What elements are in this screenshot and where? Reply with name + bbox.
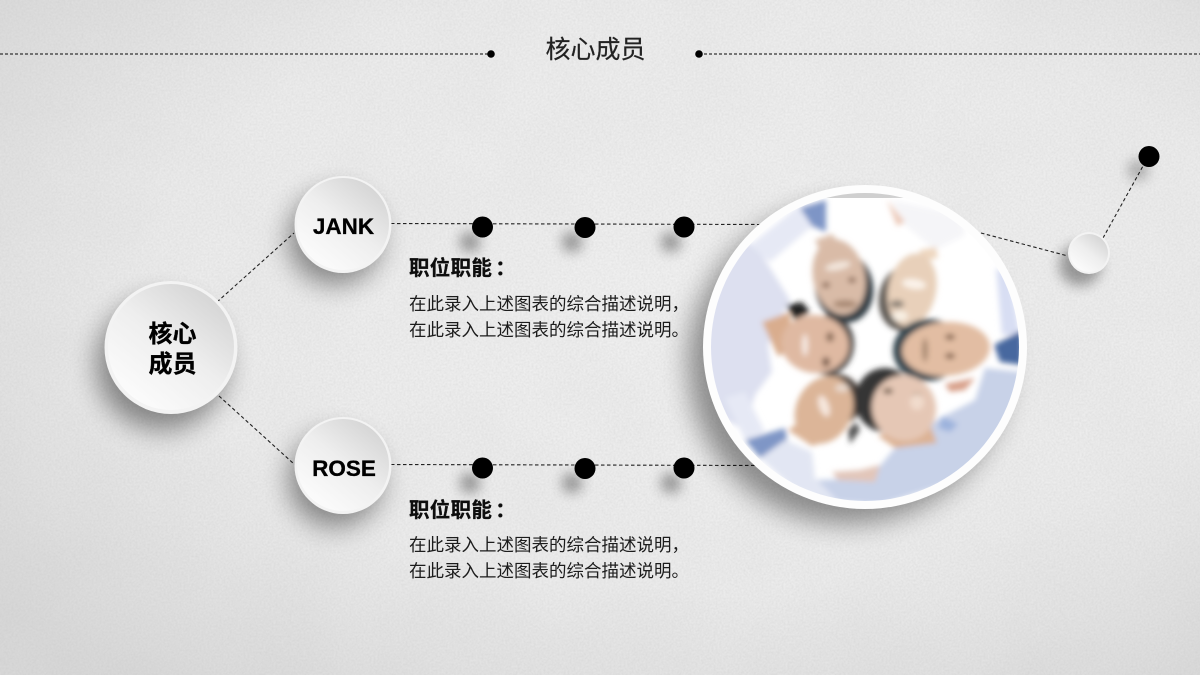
text block: ROSE duties: 在此录入上述图表的综合描述说明， — [409, 535, 689, 555]
text block: ROSE duties — [409, 498, 689, 581]
node: ROSE — [288, 417, 392, 527]
timeline dots: ROSE — [460, 458, 694, 493]
node: JANK — [288, 176, 392, 285]
text block: JANK duties — [409, 256, 689, 340]
node: ROSE: ROSE — [312, 456, 376, 481]
text block: ROSE duties: 职位职能： — [409, 498, 516, 522]
team photo in circular frame — [688, 185, 1030, 524]
face left — [818, 312, 858, 380]
face right — [888, 315, 948, 386]
central node: 核心成员 — [96, 281, 238, 430]
connector lines — [217, 166, 1143, 466]
text block: JANK duties: 在此录入上述图表的综合描述说明。 — [409, 320, 689, 340]
necks — [762, 312, 792, 356]
face bottom-left — [825, 370, 862, 424]
central node: 核心成员: 核心 — [148, 321, 196, 348]
face top-right — [874, 268, 908, 334]
title rule with dots — [0, 50, 1200, 58]
face top-left — [812, 258, 878, 328]
node: JANK: JANK — [313, 214, 375, 239]
clothing — [705, 240, 790, 430]
black endpoint dot — [1128, 146, 1160, 180]
text block: JANK duties: 职位职能： — [409, 256, 516, 280]
small node with connector — [1059, 232, 1110, 286]
central node: 核心成员: 成员 — [148, 351, 196, 378]
title: 核心成员 — [545, 36, 646, 64]
text block: ROSE duties: 在此录入上述图表的综合描述说明。 — [409, 561, 689, 581]
text block: JANK duties: 在此录入上述图表的综合描述说明， — [409, 294, 689, 314]
face bottom-right — [855, 368, 915, 432]
timeline dots: JANK — [460, 216, 694, 252]
